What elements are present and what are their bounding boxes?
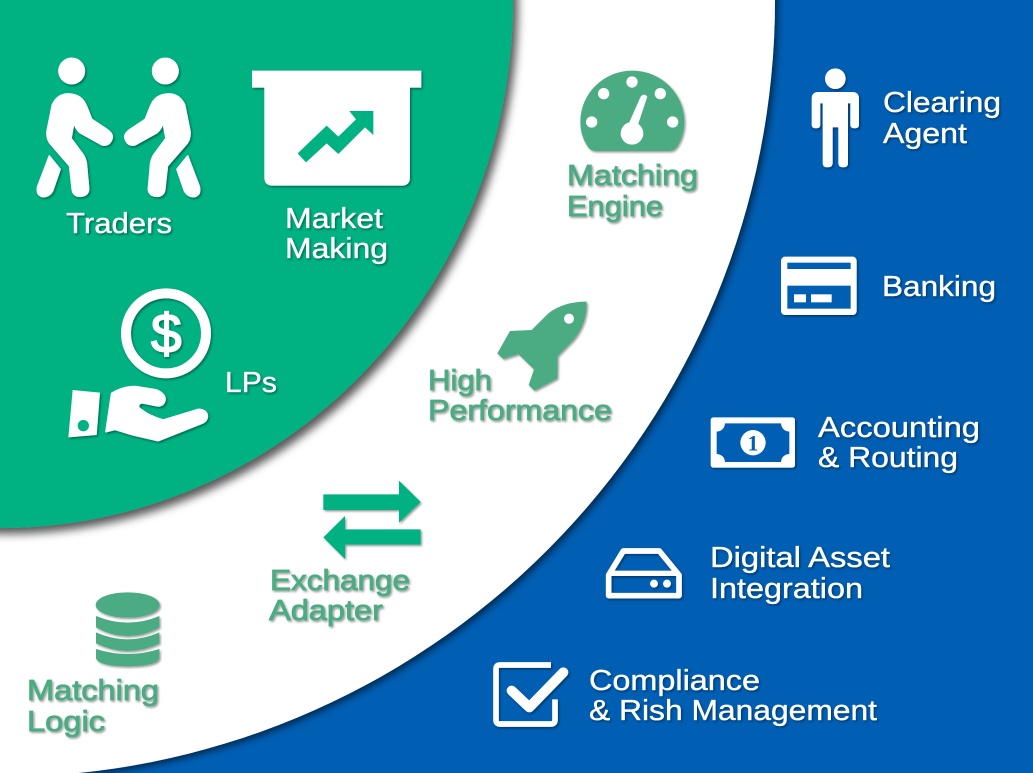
label: Digital Asset Integration: Digital Asset bbox=[710, 542, 890, 574]
panel: white middle quarter circle bbox=[0, 0, 775, 773]
label: Matching Engine: Engine bbox=[567, 191, 663, 223]
label: High Performance: Performance bbox=[428, 395, 612, 427]
label: Matching Engine: Matching bbox=[567, 160, 698, 192]
label: Matching Logic: Logic bbox=[27, 706, 105, 738]
label: Accounting & Routing bbox=[818, 412, 980, 474]
icon: hand holding dollar coin bbox=[68, 293, 207, 441]
icon: clearing agent person bbox=[812, 68, 859, 167]
icon: traders shaking hands bbox=[37, 58, 200, 197]
icon: speedometer gauge bbox=[580, 71, 684, 151]
label: Accounting & Routing: & Routing bbox=[818, 442, 958, 474]
label: Exchange Adapter: Adapter bbox=[269, 595, 383, 627]
label: High Performance bbox=[428, 365, 612, 427]
label: Exchange Adapter bbox=[269, 565, 410, 627]
icon: server drive bbox=[609, 551, 679, 596]
label: Clearing Agent bbox=[883, 87, 1001, 150]
label: Banking: Banking bbox=[882, 271, 996, 303]
label: Clearing Agent: Agent bbox=[883, 118, 967, 150]
icon: rocket bbox=[497, 302, 587, 391]
label: Compliance & Rish Management: Compliance bbox=[589, 665, 760, 697]
label: High Performance: High bbox=[428, 365, 492, 397]
label: Traders: Traders bbox=[66, 208, 172, 240]
label: Market Making bbox=[285, 203, 388, 265]
label: LPs: LPs bbox=[225, 367, 277, 399]
icon: banknote: 1 bbox=[747, 430, 758, 455]
panel: green inner quarter circle bbox=[0, 0, 513, 528]
label: Compliance & Rish Management: & Rish Management bbox=[589, 695, 877, 727]
label: Market Making: Market bbox=[285, 203, 383, 235]
label: Digital Asset Integration bbox=[710, 542, 890, 605]
icon: market making board with rising arrow bbox=[252, 71, 421, 186]
icon: compliance checkbox bbox=[496, 665, 563, 724]
icon: hand holding dollar coin: $ bbox=[151, 303, 182, 365]
icon: two-way exchange arrows bbox=[323, 481, 421, 559]
icon: bank card bbox=[781, 257, 857, 315]
label: Compliance & Rish Management bbox=[589, 665, 877, 727]
icon: database stack bbox=[96, 592, 160, 666]
label: Matching Logic bbox=[27, 675, 159, 738]
label: Accounting & Routing: Accounting bbox=[818, 412, 980, 444]
label: Matching Logic: Matching bbox=[27, 675, 159, 707]
label: Digital Asset Integration: Integration bbox=[710, 573, 863, 605]
label: Clearing Agent: Clearing bbox=[883, 87, 1001, 119]
label: Market Making: Making bbox=[285, 233, 388, 265]
label: Exchange Adapter: Exchange bbox=[270, 565, 410, 597]
icon: banknote bbox=[711, 417, 795, 468]
label: Matching Engine bbox=[567, 160, 698, 223]
